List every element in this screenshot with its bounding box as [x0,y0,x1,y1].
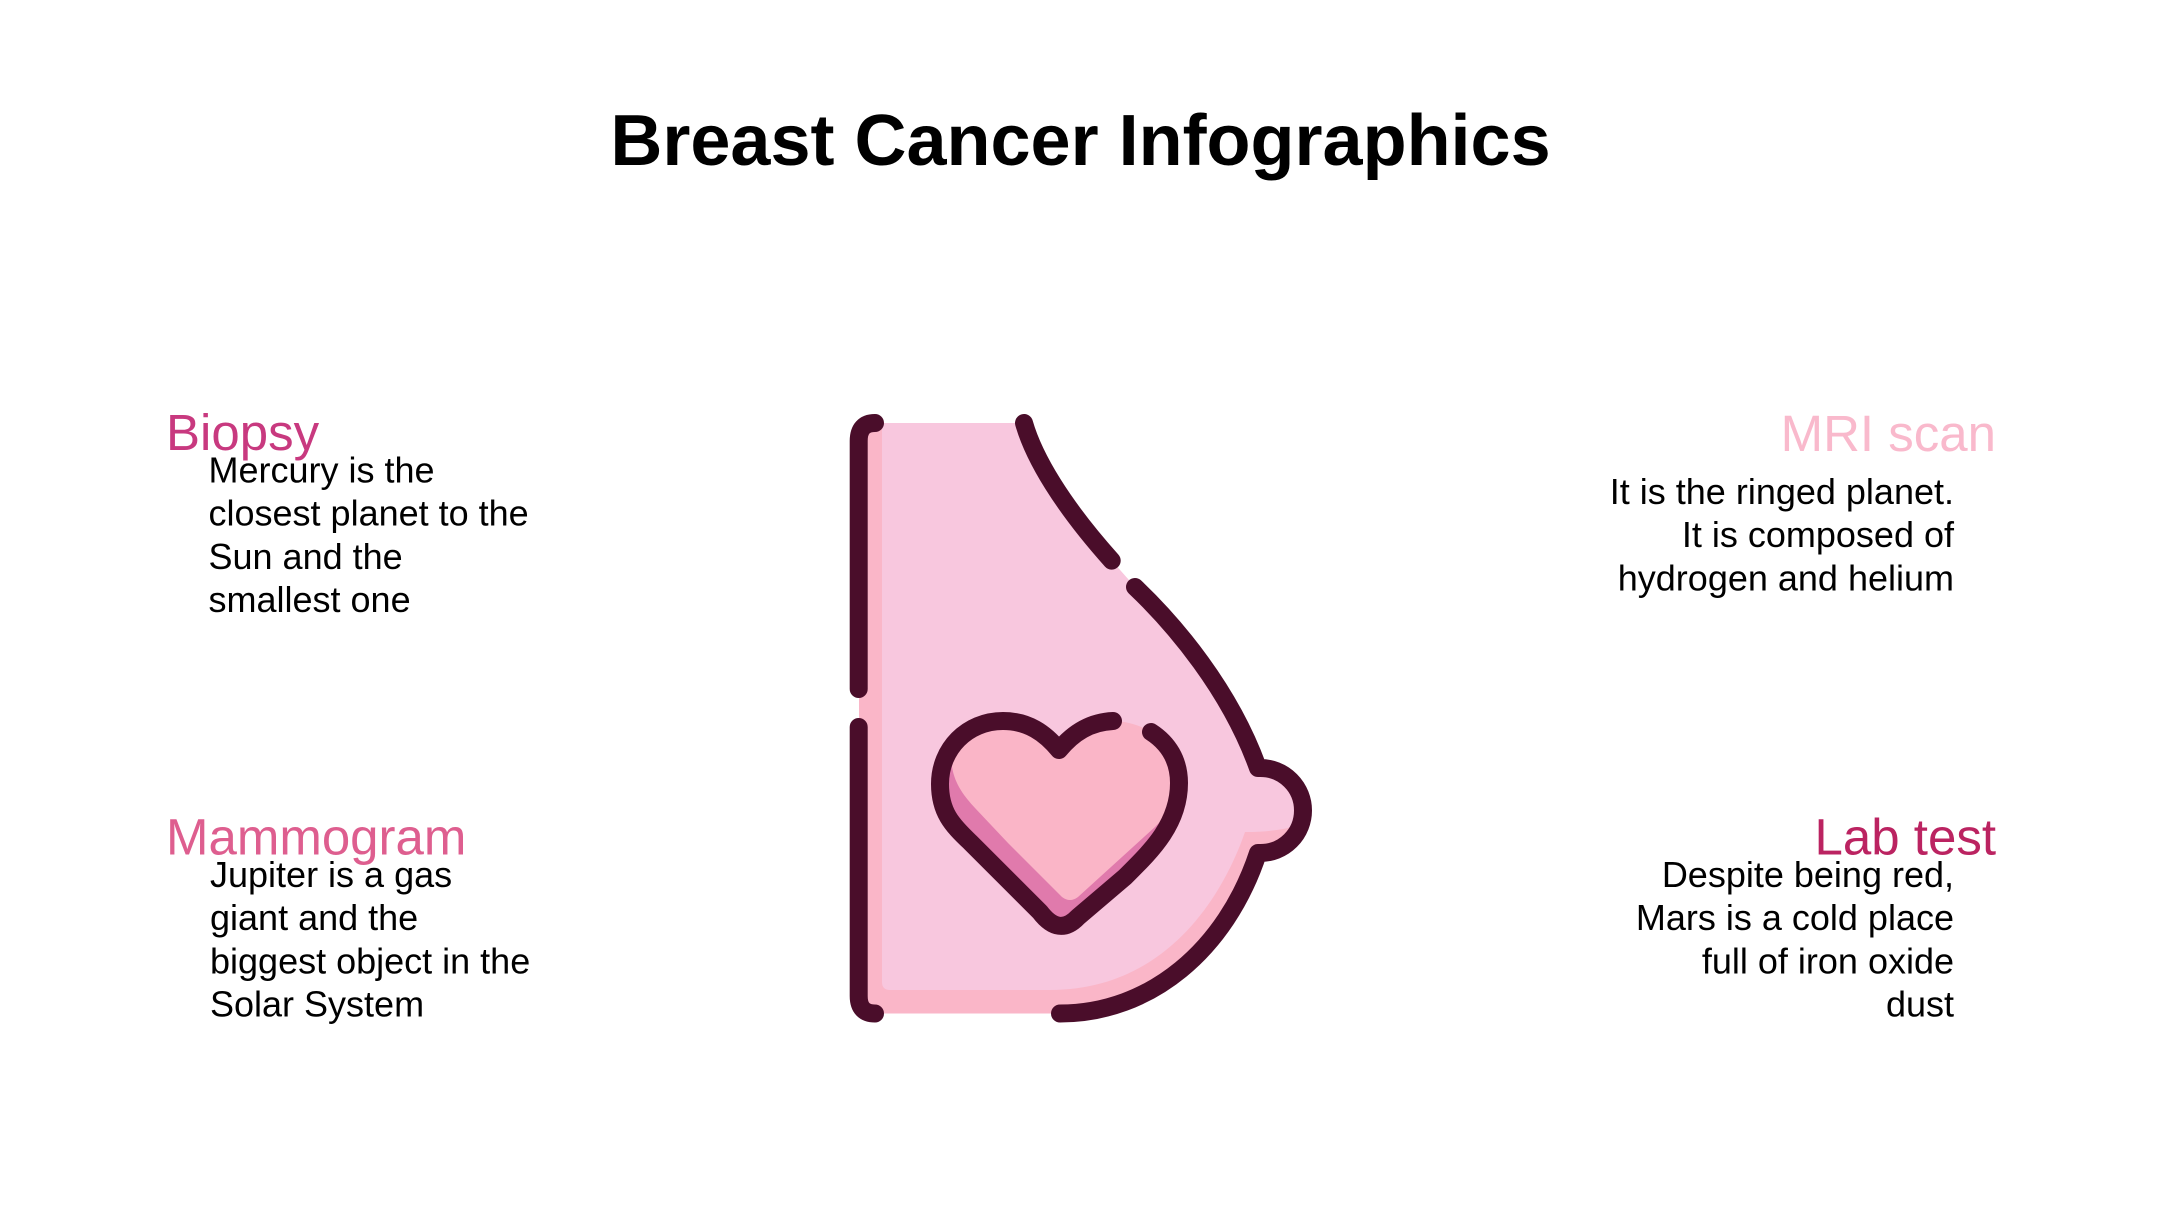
text block: Biopsy description: Sun and the [208,536,403,577]
heading: MRI scan: MRI scan [1781,405,1996,462]
heart shadow fill [940,721,1179,926]
text block: Biopsy description: smallest one [208,579,411,620]
text block: Mammogram description [210,854,530,1025]
text block: Lab test description: dust [1886,984,1954,1025]
breast outline strokes [859,423,1303,1014]
text block: Lab test description: Mars is a cold place [1636,897,1954,938]
heart outline [940,721,1179,926]
heading: Mammogram: Mammogram [166,809,466,866]
text block: Lab test description [1636,854,1954,1025]
breast light fill [882,423,1299,990]
title: Breast Cancer Infographics [610,101,1551,181]
text block: MRI scan description [1610,471,1955,598]
text block: Mammogram description: Jupiter is a gas [210,854,452,895]
panel: Lab test [1636,809,1996,1025]
text block: MRI scan description: It is the ringed planet. [1610,471,1954,512]
heading: Lab test: Lab test [1815,809,1996,866]
text block: Biopsy description [208,449,529,620]
panel: Mammogram [166,809,530,1025]
text block: MRI scan description: It is composed of [1682,514,1955,555]
heart light fill [952,721,1179,900]
text block: Mammogram description: Solar System [210,984,424,1025]
text block: Lab test description: full of iron oxide [1702,940,1954,981]
panel: Biopsy [166,404,529,620]
text block: Biopsy description: Mercury is the [208,449,435,490]
panel: MRI scan [1610,405,1996,598]
heading: Biopsy: Biopsy [166,404,320,461]
icon: breast with heart [859,423,1303,1014]
text block: Biopsy description: closest planet to the [208,492,529,534]
text block: Mammogram description: biggest object in the [210,940,530,981]
text block: Lab test description: Despite being red, [1662,854,1954,895]
breast base fill [859,423,1303,1014]
text block: Mammogram description: giant and the [210,897,418,938]
text block: MRI scan description: hydrogen and helium [1618,557,1954,598]
